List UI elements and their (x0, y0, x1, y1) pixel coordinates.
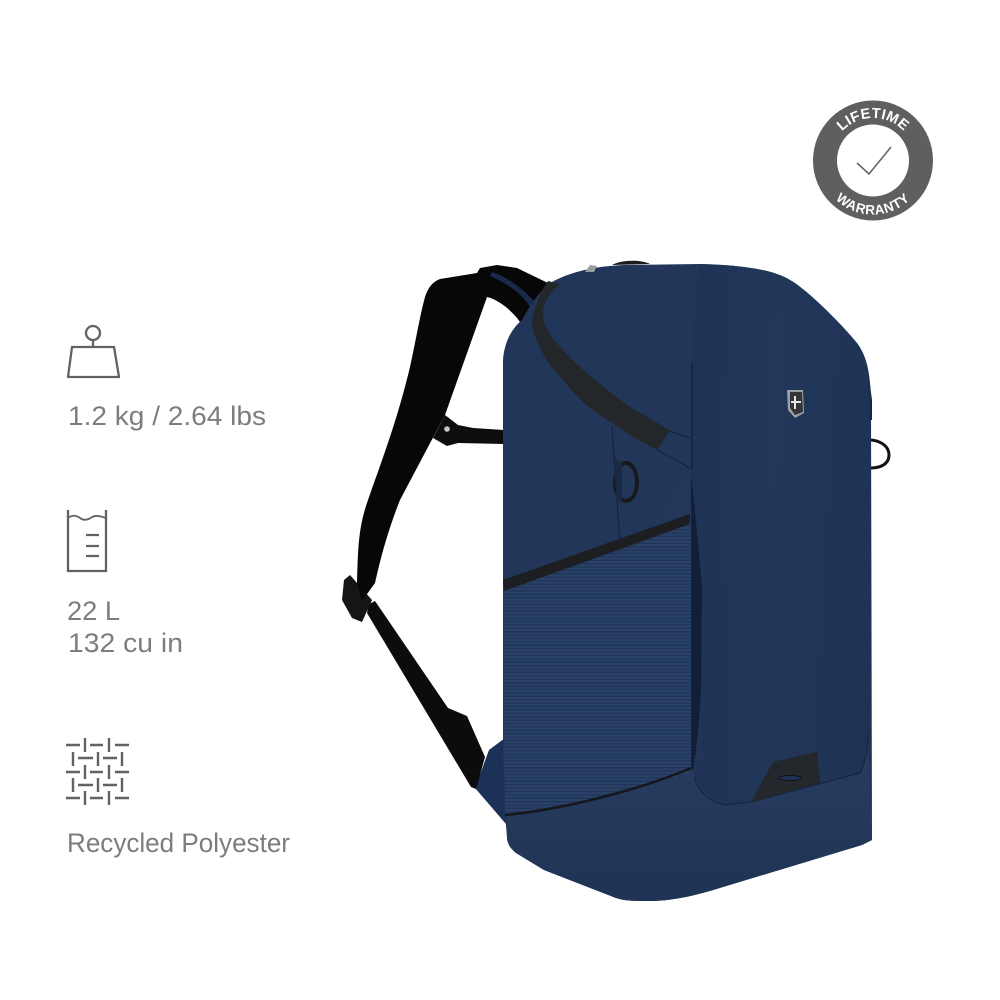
right d-ring loop (871, 440, 889, 468)
spec: weight (68, 326, 266, 431)
base seam cord (505, 768, 691, 815)
tab slot (779, 776, 801, 780)
front panel (692, 264, 871, 805)
icon: check mark (857, 147, 891, 174)
padded shoulder strap (357, 265, 552, 601)
spec: material (66, 738, 290, 858)
mesh pocket (503, 520, 701, 815)
ring gusset (613, 457, 622, 503)
badge text: warranty: WARRANTY (837, 192, 908, 215)
logo badge (787, 390, 804, 418)
panel seam (691, 362, 693, 470)
icon: woven fabric (66, 738, 129, 805)
icon: weight (68, 326, 119, 377)
blue strap lining (490, 272, 534, 308)
badge text: lifetime: LIFETIME (836, 108, 910, 131)
volume value cubic inches: 132 cu in (68, 628, 183, 658)
pocket gusset seams (612, 427, 690, 543)
volume value litres: 22 L (67, 596, 120, 626)
back padding side (475, 738, 506, 824)
panel bottom outline (694, 730, 868, 805)
base panel (505, 738, 872, 901)
main body (503, 264, 872, 901)
spec: volume (67, 510, 183, 658)
diagonal webbing strap (532, 281, 670, 450)
lower shoulder strap (367, 601, 485, 789)
strap buckle (342, 575, 372, 622)
badge: lifetime warranty (813, 100, 933, 220)
right edge shading (868, 370, 872, 420)
inner d-ring (615, 463, 637, 501)
zipper puller (585, 265, 597, 272)
strap rivet (444, 426, 450, 432)
backpack product image (342, 261, 889, 901)
icon: beaker (68, 510, 106, 571)
weight value: 1.2 kg / 2.64 lbs (68, 401, 266, 431)
zipper head (612, 261, 650, 265)
panel edge shadow (691, 470, 702, 772)
material label: Recycled Polyester (67, 828, 290, 858)
bottom tab (751, 752, 820, 802)
load lifter strap (433, 415, 504, 446)
pocket opening binding (503, 514, 690, 591)
